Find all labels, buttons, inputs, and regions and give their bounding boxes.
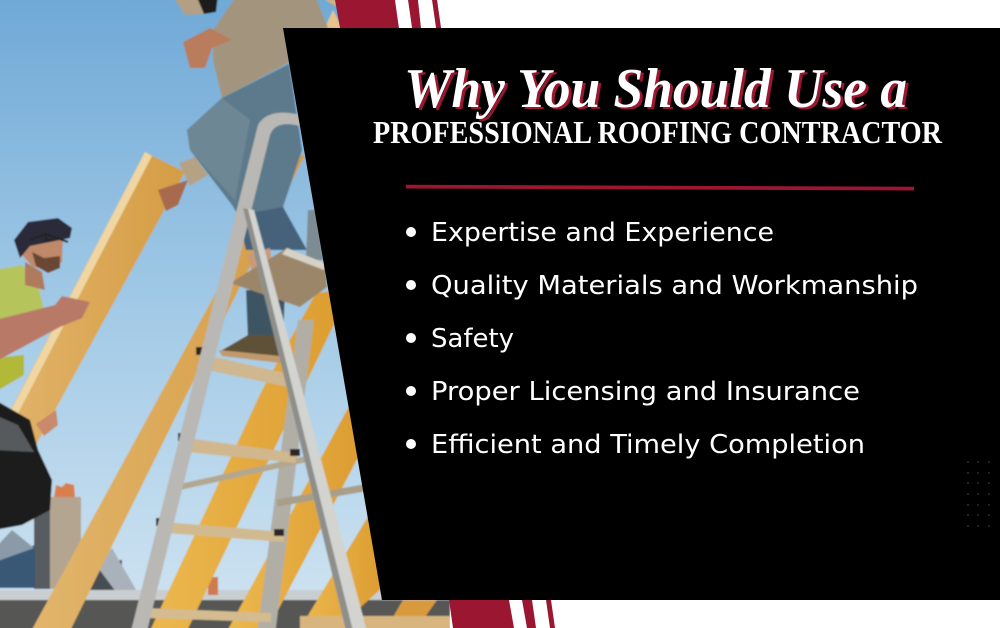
item: completion: Efficient and Timely Completion xyxy=(431,430,865,460)
bullet list xyxy=(406,218,918,460)
item: quality: Quality Materials and Workmanship xyxy=(431,271,918,301)
left worker xyxy=(0,218,90,530)
wooden planks xyxy=(0,0,450,628)
top accent stripes xyxy=(335,0,441,28)
title: Why You Should Use a xyxy=(407,60,910,122)
sky xyxy=(0,0,460,628)
item: expertise: Expertise and Experience xyxy=(431,218,774,248)
rear legs xyxy=(257,320,314,628)
item: safety: Safety xyxy=(431,324,514,354)
front left leg xyxy=(130,113,300,628)
step brackets xyxy=(156,347,300,536)
front right leg xyxy=(243,208,368,628)
panel: black content panel xyxy=(283,28,1000,600)
chimney xyxy=(34,483,81,589)
item: licensing: Proper Licensing and Insurance xyxy=(431,377,860,407)
neighbouring roofs xyxy=(0,530,450,628)
steps xyxy=(230,248,327,307)
panel: construction photo xyxy=(0,0,460,628)
decorative dot grid xyxy=(967,461,990,527)
bottom accent stripes xyxy=(449,600,1000,628)
aluminium ladder xyxy=(130,113,368,628)
top white background xyxy=(437,0,1000,28)
top worker xyxy=(158,0,328,364)
divider line xyxy=(406,185,914,190)
braces xyxy=(180,458,311,487)
title: Why You Should Use a xyxy=(404,58,907,120)
